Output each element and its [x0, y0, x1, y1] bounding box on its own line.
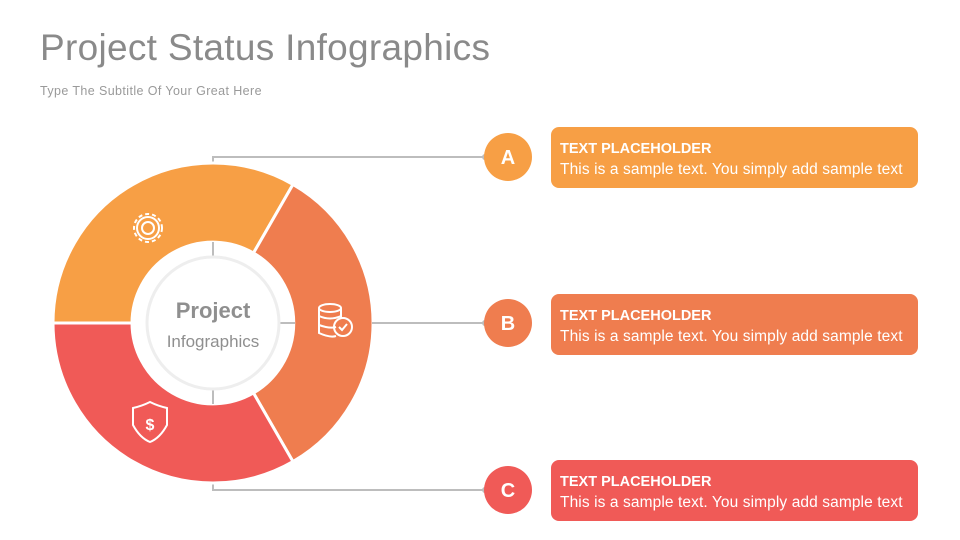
center circle: Infographics — [167, 332, 259, 351]
markers A B C: B — [501, 313, 515, 335]
box B: TEXT PLACEHOLDER — [560, 308, 711, 324]
box C: This is a sample text. You simply add sample text — [560, 494, 903, 511]
title: Project Status Infographics — [40, 27, 490, 68]
box C: TEXT PLACEHOLDER — [560, 474, 711, 490]
donut chart — [53, 163, 373, 483]
center circle: Project — [176, 298, 251, 323]
box B: This is a sample text. You simply add sample text — [560, 328, 903, 345]
box B — [551, 294, 918, 355]
icon: shield dollar — [133, 402, 167, 442]
markers A B C: C — [501, 480, 515, 502]
connector lines — [213, 157, 485, 490]
box A — [551, 127, 918, 188]
box C — [551, 460, 918, 521]
box A: TEXT PLACEHOLDER — [560, 141, 711, 157]
icon: database check — [319, 304, 352, 337]
markers A B C: A — [501, 147, 515, 169]
markers A B C — [482, 133, 532, 514]
subtitle: Type The Subtitle Of Your Great Here — [40, 84, 262, 98]
box A: This is a sample text. You simply add sample text — [560, 161, 903, 178]
icon: shield dollar: $ — [146, 417, 155, 434]
center circle — [132, 242, 295, 404]
icon: gear — [134, 214, 162, 242]
